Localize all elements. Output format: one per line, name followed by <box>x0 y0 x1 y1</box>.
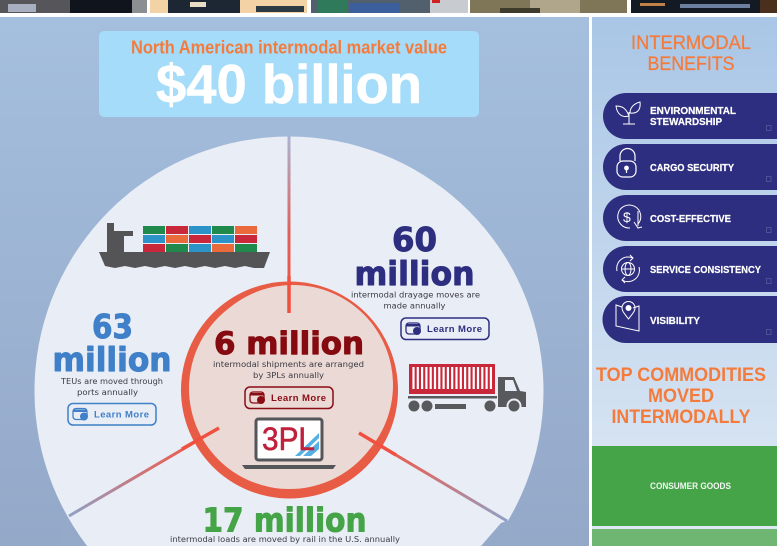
banner heading: North American intermodal market value <box>131 36 447 58</box>
stat: 63: 63 <box>92 307 133 346</box>
benefit: cost-effective <box>603 195 777 241</box>
label: CARGO SECURITY <box>650 163 734 174</box>
heading: intermodal benefits <box>631 33 751 75</box>
icon: map pin <box>616 302 639 331</box>
description: TEUs are moved through <box>60 377 163 386</box>
icon: leaf <box>616 102 640 124</box>
benefit: visibility <box>602 296 777 343</box>
banner value: $40 billion <box>156 53 422 115</box>
icon: globe with arrows <box>617 255 639 283</box>
learn more button <box>245 387 333 408</box>
icon: laptop with 3PL <box>242 419 336 469</box>
stat: 6 million: 6 million <box>214 326 364 362</box>
commodity: consumer goods <box>592 446 777 526</box>
segment: 60 million drayage <box>351 220 526 414</box>
right divider <box>359 433 507 521</box>
stat: million: million <box>52 340 172 379</box>
market value banner <box>99 31 479 117</box>
icon: padlock <box>617 149 636 177</box>
heading: intermodal benefits: INTERMODAL <box>631 33 751 54</box>
right divider inner part <box>359 433 396 455</box>
label: VISIBILITY <box>650 316 700 327</box>
left background panel <box>0 17 589 546</box>
segment: 17 million rail <box>170 500 400 544</box>
description: intermodal shipments are arranged <box>213 360 364 369</box>
icon: container ship <box>99 223 270 268</box>
left divider inner part <box>182 428 219 449</box>
learn more button: Learn More <box>427 324 482 335</box>
label: COST-EFFECTIVE <box>650 214 731 225</box>
commodity: next tile <box>592 529 777 546</box>
heading: top commodities <box>596 364 766 428</box>
heading: intermodal benefits: BENEFITS <box>648 54 734 75</box>
stat: 60: 60 <box>392 220 437 259</box>
heading: top commodities: TOP COMMODITIES <box>596 364 766 386</box>
label: SERVICE CONSISTENCY <box>650 265 761 276</box>
icon: laptop with 3PL: 3PL <box>262 421 315 457</box>
learn more button <box>401 318 489 340</box>
label: ENVIRONMENTAL <box>650 106 736 117</box>
description: intermodal drayage moves are <box>351 290 480 300</box>
heading: top commodities: INTERMODALLY <box>612 406 750 428</box>
bottom-left notch <box>60 516 86 546</box>
description line 2: by 3PLs annually <box>253 371 324 380</box>
learn more button: Learn More <box>271 393 326 404</box>
photo strip <box>0 0 777 13</box>
top divider <box>288 136 290 313</box>
right background panel <box>592 17 777 546</box>
segmented circle <box>35 136 543 546</box>
icon: dollar circle: $ <box>623 209 631 225</box>
commodity: consumer goods: CONSUMER GOODS <box>650 481 731 491</box>
description: intermodal loads are moved by rail in the U.S. annually <box>170 535 400 544</box>
learn more button: Learn More <box>94 410 149 420</box>
benefit: environmental stewardship <box>603 93 777 139</box>
learn more button <box>68 404 156 425</box>
top divider inner part <box>287 276 291 313</box>
left divider <box>69 428 219 516</box>
benefit: cargo security <box>603 144 777 190</box>
bottom-right notch <box>481 516 520 546</box>
heading: top commodities: MOVED <box>648 385 714 407</box>
stat: 17 million: 17 million <box>202 500 366 540</box>
icon: dollar circle <box>618 205 642 228</box>
icon: container truck <box>408 364 526 414</box>
stat: million: million <box>354 254 474 293</box>
segment: 63 million TEUs <box>52 223 270 425</box>
benefit: service consistency <box>603 246 777 292</box>
benefit: environmental stewardship: STEWARDSHIP <box>650 117 722 128</box>
centre circle: 3PLs <box>181 276 398 498</box>
description line 2: ports annually <box>77 388 138 397</box>
description line 2: made annually <box>384 302 446 310</box>
